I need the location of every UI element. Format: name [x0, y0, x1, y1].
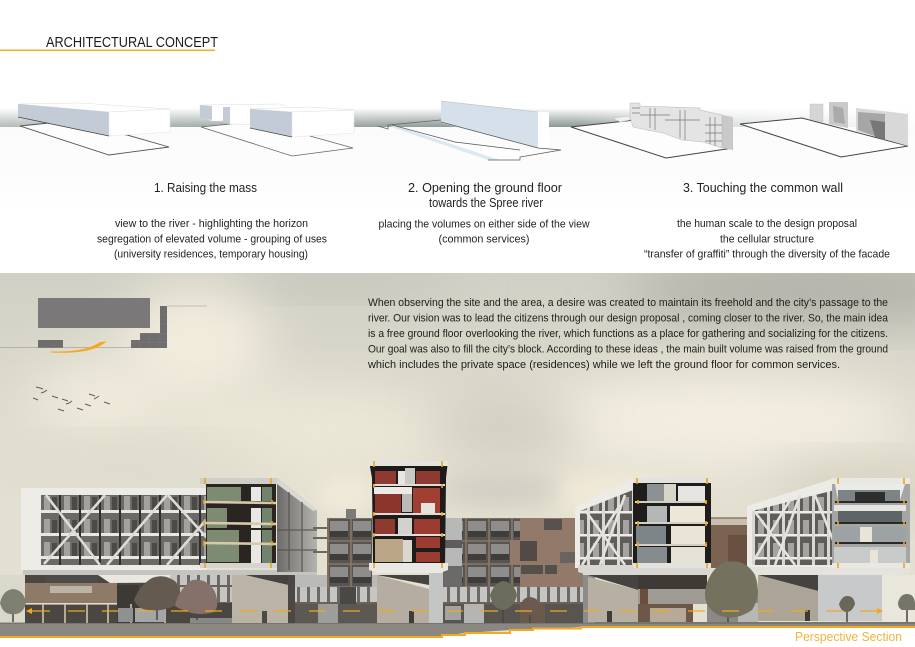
- diagram 5: transfer of graffiti: [740, 102, 908, 157]
- step 3 text: [644, 180, 890, 260]
- podium base: [0, 572, 915, 623]
- arrow: passage under the volume: [51, 342, 107, 353]
- panel: sky with clouds: [0, 260, 915, 638]
- step 3 text: the human scale to the design proposal: [677, 218, 857, 230]
- massing diagram: [0, 298, 207, 353]
- step 2 text: towards the Spree river: [429, 195, 544, 210]
- trees: [0, 561, 915, 623]
- step 1 text: [97, 180, 327, 260]
- paragraph: is a free ground floor overlooking the river, which functions as a place for gathering and socializing for the citizens.: [368, 328, 888, 340]
- central section tower: [369, 461, 448, 573]
- step 1 text: (university residences, temporary housing): [114, 248, 308, 260]
- step 2 text: (common services): [438, 234, 530, 246]
- diagram 1: raising the mass: [18, 103, 170, 155]
- panel: concept diagrams: [0, 101, 915, 207]
- ground: [0, 622, 915, 636]
- perspective section drawing: [0, 461, 915, 636]
- title: ARCHITECTURAL CONCEPT: [46, 35, 218, 51]
- paragraph: which includes the private space (residences) while we left the ground floor for common services.: [367, 359, 840, 371]
- step 2 text: placing the volumes on either side of the view: [378, 218, 590, 230]
- diagram 3: opening the ground floor: [378, 101, 561, 160]
- step 1 text: view to the river - highlighting the horizon: [115, 218, 308, 230]
- left building: [21, 478, 327, 575]
- circulation arrows: [26, 608, 883, 614]
- step 1 text: segregation of elevated volume - grouping of uses: [97, 234, 327, 246]
- right building 2: [747, 478, 910, 575]
- paragraph: When observing the site and the area, a desire was created to maintain its freehold and the city’s passage to the: [368, 297, 888, 309]
- step 1 text: 1. Raising the mass: [154, 180, 257, 195]
- diagram 2: grouped volumes: [200, 104, 354, 156]
- right building 1: [575, 478, 711, 575]
- orange ground line: [0, 627, 915, 637]
- step 2 text: [378, 180, 590, 246]
- step 2 text: 2. Opening the ground floor: [408, 180, 563, 195]
- central modular block: [327, 509, 752, 590]
- section cut: green rooms: [200, 478, 277, 568]
- step 3 text: 3. Touching the common wall: [683, 180, 843, 195]
- step 3 text: the cellular structure: [720, 234, 814, 246]
- step 3 text: “transfer of graffiti” through the diversity of the facade: [644, 248, 890, 260]
- white base: [0, 627, 915, 647]
- diagram 4: touching the common wall: [571, 103, 733, 158]
- caption: Perspective Section: [795, 630, 902, 644]
- birds: [33, 387, 110, 411]
- paragraph: [367, 297, 889, 371]
